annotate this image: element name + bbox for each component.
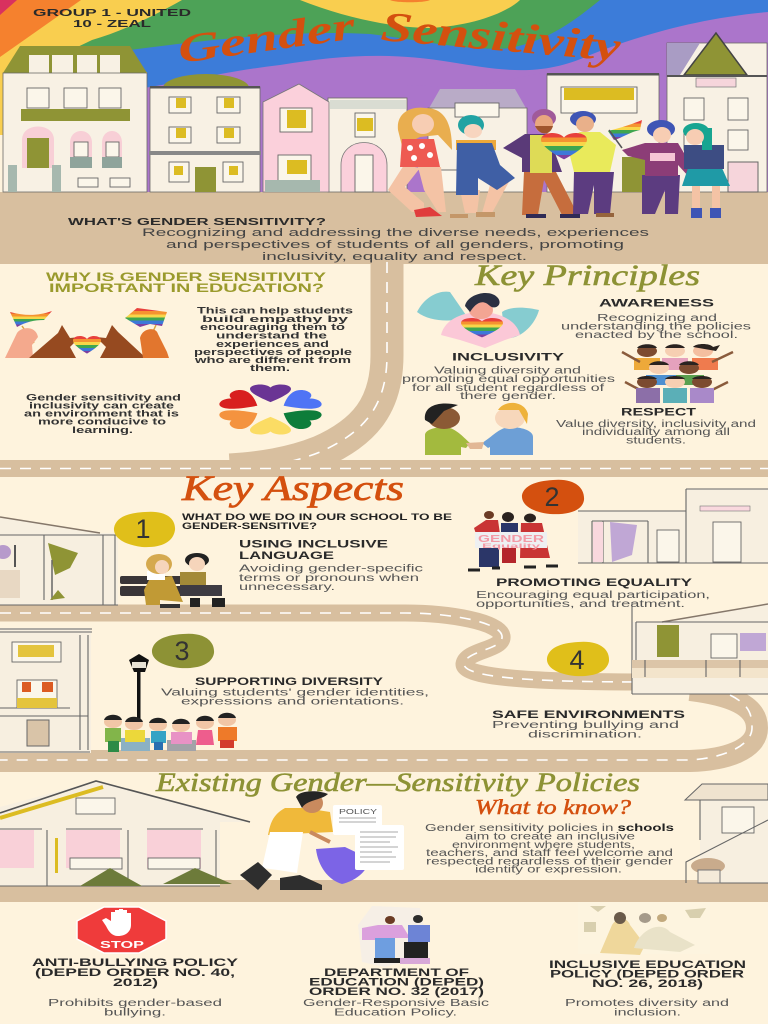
group label: 10 - ZEAL (73, 18, 152, 30)
aspect 3 text: SUPPORTING DIVERSITY (195, 676, 384, 688)
icon: handshake (425, 403, 533, 455)
principle: awareness: enacted by the school. (575, 330, 738, 341)
principle: inclusivity (402, 352, 615, 402)
principle: respect: Value diversity, inclusivity and (556, 419, 756, 430)
building row (3, 33, 767, 192)
intro: what's gender sensitivity: Recognizing and addressing the diverse needs, experiences (142, 227, 650, 239)
person: yellow shirt (566, 111, 616, 217)
aspect 3 text: expressions and orientations. (181, 696, 404, 708)
principle: respect: students. (626, 436, 686, 446)
icon: flower of hearts (216, 384, 325, 434)
aspect 3 text: Valuing students' gender identities, (161, 688, 429, 698)
principle: respect (556, 406, 756, 446)
aspect 4 text: discrimination. (528, 730, 642, 740)
heading: key principles: Key Principles (474, 259, 700, 292)
house: policy left (0, 781, 250, 886)
text: policies intro: teachers, and staff feel welcome and (426, 848, 673, 859)
intro: what's gender sensitivity: and perspectives of students of all genders, promoting (166, 239, 624, 251)
title: Gender (175, 2, 358, 72)
road: cross street band (0, 460, 768, 477)
principle: respect: RESPECT (621, 406, 696, 418)
policy 3 text (549, 959, 746, 1018)
aspect 1 text: USING INCLUSIVE (239, 538, 388, 550)
heading: key aspects: Key Aspects (181, 468, 404, 508)
text: conducive: more conducive to (38, 416, 167, 426)
text: policies intro: aim to create an inclusive (465, 832, 636, 842)
house: aspect 2 (578, 489, 768, 563)
intro: what's gender sensitivity: inclusivity, equality and respect. (262, 251, 527, 263)
text: empathy: build empathy by (202, 314, 348, 324)
principle: inclusivity: there gender. (460, 391, 556, 402)
aspect 1 text: terms or pronouns when (239, 573, 419, 584)
house: aspect 3 (0, 628, 92, 753)
icon: group of children (622, 344, 733, 403)
aspect 1 text: unnecessary. (239, 582, 335, 593)
person: red dress (388, 108, 452, 217)
policy 1 text (32, 957, 239, 1018)
text: empathy: them. (250, 363, 290, 373)
aspect 2 text (476, 577, 710, 610)
building 3 (263, 84, 407, 192)
policy 1 text: 2012) (113, 977, 159, 989)
policy 1 text: (DEPED ORDER NO. 40, (35, 967, 235, 979)
policy 2 text: ORDER NO. 32 (2017) (309, 986, 485, 998)
heading: why important (46, 270, 326, 295)
principle: inclusivity: Valuing diversity and (434, 366, 581, 376)
text: policies intro: environment where students, (452, 840, 635, 851)
heading: what to know: What to know? (475, 795, 632, 819)
road: main street band (0, 192, 768, 264)
person: teal hair (682, 123, 730, 218)
building 2 (149, 74, 261, 192)
intro: what's gender sensitivity: WHAT'S GENDER SENSITIVITY? (68, 216, 326, 228)
house: policy right (685, 784, 768, 883)
aspect 4 text: Preventing bullying and (492, 720, 679, 731)
aspect 4 text: SAFE ENVIRONMENTS (492, 709, 685, 721)
badge 2 (522, 480, 584, 514)
road: winding S street (0, 613, 650, 682)
badge 3: 3 (174, 636, 190, 666)
text: policies intro: respected regardless of their gender (426, 856, 674, 868)
building 1 (3, 46, 147, 192)
icon: rainbow heart (541, 133, 587, 159)
badge 4 (547, 642, 609, 676)
text: empathy: experiences and (216, 339, 329, 349)
road: vertical branch curving to cross street (230, 262, 387, 470)
badge 1 (114, 512, 175, 547)
building 5 (547, 73, 659, 192)
text: empathy (193, 306, 353, 373)
aspect 4 text (492, 709, 685, 740)
house: aspect 4 (632, 602, 768, 694)
building 6 (667, 33, 767, 192)
badge 4: 4 (569, 645, 585, 675)
icon: inclusive education group (578, 902, 710, 955)
badge 2: 2 (544, 482, 560, 512)
text: policies intro (425, 823, 675, 876)
aspect 2 text: opportunities, and treatment. (476, 599, 685, 610)
people group (388, 108, 730, 218)
aspect 1 text: LANGUAGE (239, 550, 334, 562)
principle: inclusivity: INCLUSIVITY (452, 352, 565, 364)
text: conducive (24, 392, 181, 435)
policy 3 text: POLICY (DEPED ORDER (550, 968, 744, 980)
policy 2 text: EDUCATION (DEPED) (309, 976, 485, 988)
principle: inclusivity: promoting equal opportunities (402, 374, 615, 385)
policy 2 text: Gender-Responsive Basic (303, 998, 489, 1009)
icon: stop sign: STOP (100, 940, 145, 951)
heading: why important: WHY IS GENDER SENSITIVITY (46, 270, 326, 284)
person: bearded man (503, 109, 580, 218)
policy 1 text: Prohibits gender-based (48, 998, 222, 1009)
badge 1: 1 (135, 514, 151, 544)
person: magenta top (622, 120, 697, 214)
icon: rainbow flag (608, 120, 642, 148)
text: policies intro: identity or expression. (475, 864, 622, 876)
group label: GROUP 1 - UNITED (33, 7, 192, 19)
text: empathy: This can help students (197, 306, 353, 316)
person: blue overalls (450, 115, 515, 218)
icon: hands with flags and heart (5, 308, 169, 358)
badge 3 (152, 634, 214, 668)
policy 3 text: inclusion. (614, 1008, 681, 1018)
policy 2 text: Education Policy. (334, 1008, 457, 1018)
title (175, 2, 623, 72)
icon: group with gender equality sign (468, 511, 558, 570)
aspect 1 text: Avoiding gender-specific (239, 564, 423, 574)
policy 3 text: INCLUSIVE EDUCATION (549, 959, 746, 971)
policy 3 text: NO. 26, 2018) (592, 978, 704, 990)
icon: person with policy and shield: POLICY (339, 807, 377, 816)
icon: street lamp (129, 654, 149, 725)
text: empathy: perspectives of people (194, 347, 352, 357)
principle: awareness: AWARENESS (599, 298, 714, 310)
principle: respect: individuality among all (582, 427, 730, 438)
icon: group with gender equality sign: GENDER (478, 534, 545, 545)
text: conducive: learning. (72, 425, 133, 435)
text: conducive: inclusivity can create (29, 400, 174, 410)
text: what do we do (182, 512, 452, 531)
rainbow wave background (0, 0, 768, 195)
principle: awareness: understanding the policies (561, 322, 751, 332)
aspect 2 text: PROMOTING EQUALITY (496, 577, 693, 589)
text: conducive: an environment that is (24, 408, 179, 418)
text: what do we do: WHAT DO WE DO IN OUR SCHOOL TO BE (182, 512, 452, 522)
house: aspect 1 (0, 517, 118, 605)
icon: diverse children (104, 713, 237, 752)
principle: awareness: Recognizing and (597, 313, 717, 324)
text: policies intro: Gender sensitivity policies in schools (425, 823, 675, 834)
intro: what's gender sensitivity (68, 216, 650, 263)
policy 3 text: Promotes diversity and (565, 998, 729, 1009)
policy 2 text (303, 967, 489, 1018)
aspect 3 text (161, 676, 429, 708)
group label (33, 7, 192, 30)
road: policy street band (0, 880, 768, 902)
title: Sensitivity (379, 4, 623, 71)
icon: children on bench (120, 553, 225, 608)
policy 1 text: bullying. (104, 1008, 166, 1018)
icon: stop sign (77, 907, 166, 953)
aspect 1 text (239, 538, 423, 593)
icon: group with gender equality sign: Equality (482, 544, 542, 550)
text: empathy: encouraging them to (200, 322, 346, 332)
text: what do we do: GENDER-SENSITIVE? (182, 521, 317, 531)
heading: existing policies: Existing Gender—Sensitivity Policies (155, 768, 640, 797)
icon: person with policy and shield (240, 791, 404, 890)
text: empathy: understand the (216, 330, 327, 340)
principle: inclusivity: for all student regardless of (412, 383, 604, 394)
road: lower street (0, 690, 757, 761)
policy 1 text: ANTI-BULLYING POLICY (32, 957, 239, 969)
icon: two people and policy paper (358, 906, 430, 967)
building 4 (428, 89, 527, 192)
icon: woman holding rainbow heart (417, 292, 539, 348)
text: conducive: Gender sensitivity and (26, 392, 181, 402)
text: empathy: who are different from (193, 355, 351, 365)
principle: awareness (561, 298, 751, 341)
policy 2 text: DEPARTMENT OF (324, 967, 469, 979)
aspect 2 text: Encouraging equal participation, (476, 590, 710, 601)
heading: why important: IMPORTANT IN EDUCATION? (49, 281, 324, 295)
